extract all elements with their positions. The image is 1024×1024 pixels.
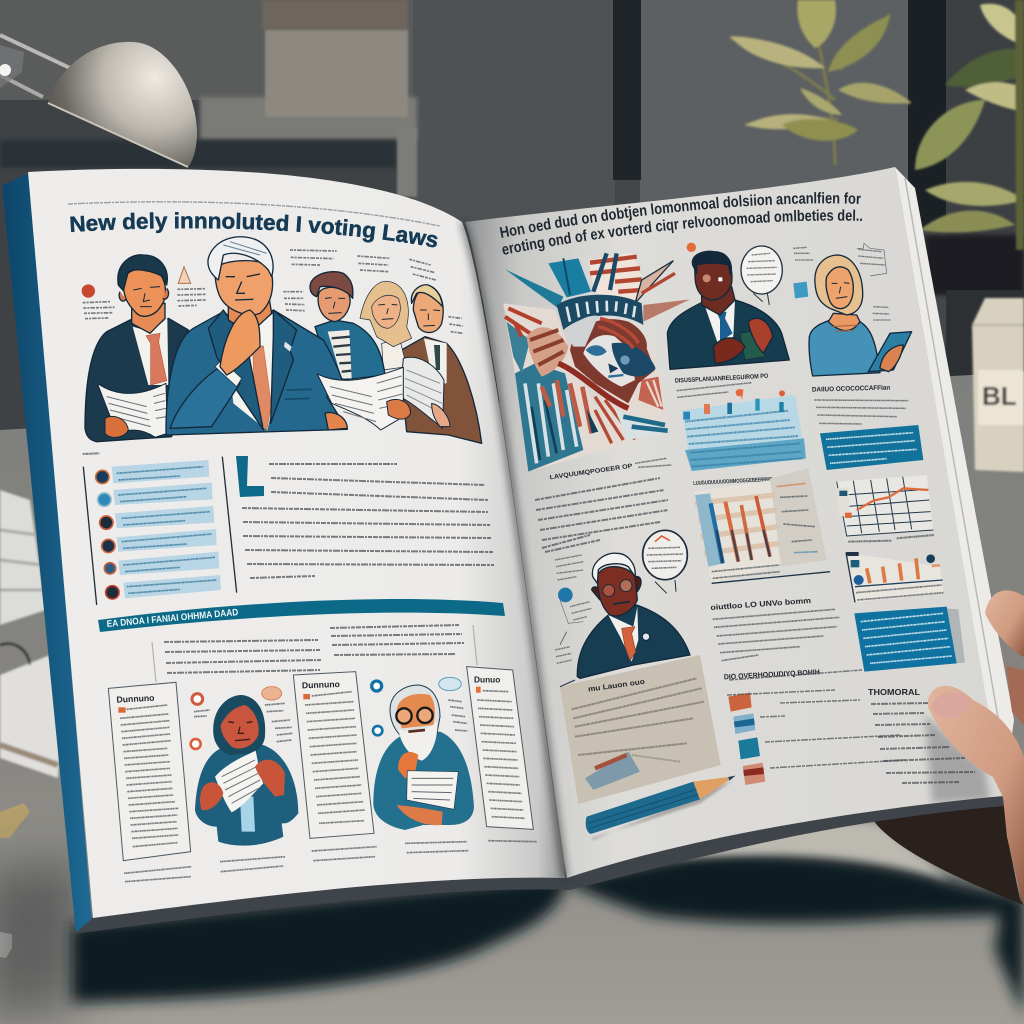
annotation (555, 555, 592, 663)
panel: beige note box: mu Lauon ouo (587, 677, 646, 694)
sidebar box 3 (467, 667, 533, 829)
thumb nail (930, 689, 972, 721)
icon: plant leaves (730, 0, 1024, 250)
section heading: DAIIUO OCOCOCCAFFIan (812, 385, 890, 394)
icon: pencil (586, 776, 736, 840)
small label (83, 450, 99, 457)
upper right illustrations (549, 243, 912, 481)
band text: EA DNOA I FANIAI OHHMA DAAD (106, 607, 239, 630)
crown rays (505, 253, 690, 322)
newspaper: right pair (317, 357, 450, 430)
icons: profile badges (191, 677, 461, 749)
section text (713, 609, 839, 661)
chart heading: LUUGUOUUUUOOMMOOGGEBEERRMS (693, 477, 773, 487)
caption heading: LAVQUUMQPOOEER OP (549, 463, 633, 481)
desk shading left (0, 860, 85, 1024)
legend text lines (727, 670, 905, 768)
panel: teal callout top (820, 425, 923, 470)
section heading: THOMORAL (868, 687, 920, 697)
captions and callouts (124, 700, 537, 882)
illustration: group of people reading newspapers (82, 237, 482, 443)
hand holding the book (928, 590, 1024, 905)
icon: tiny pin (687, 243, 696, 252)
list panel (83, 453, 237, 605)
colour swatches (728, 693, 765, 785)
robe and arm (503, 303, 668, 472)
finger: upper (985, 590, 1024, 657)
book shadow right (562, 853, 1024, 1015)
box on the desk: BL (982, 381, 1017, 411)
desk surface (0, 372, 1024, 1024)
spine shadow (463, 222, 565, 878)
charts column (682, 389, 965, 672)
background: wall and shelves (0, 0, 1024, 470)
illustration: old man in suit (577, 553, 690, 678)
section heading: DIO OVERHOOUDIYQ BOHIH (724, 667, 820, 681)
title: New dely innnoluted I voting Laws (70, 212, 438, 248)
book cover and page edges (2, 167, 1014, 934)
light pool on desk under the book (660, 821, 950, 880)
hand under the book (873, 796, 1024, 905)
illustration: Statue of Liberty (503, 253, 690, 472)
illustration: man in navy suit with phone (667, 251, 789, 369)
callout outline (857, 243, 887, 276)
sidebar box 1: Dunnuno (116, 693, 155, 705)
right page subtitle: eroting ond of ex vorterd ciqr relvoonomoad omlbeties del.. (502, 209, 862, 254)
icon: small house (178, 267, 191, 283)
speech bubble (643, 530, 687, 593)
small top rule text on left page (68, 202, 440, 226)
heading band (98, 599, 505, 632)
drop cap L (236, 456, 264, 497)
annotation text lines (793, 247, 891, 320)
person: blue suit man in centre (166, 237, 347, 435)
icon: tiny card (793, 282, 808, 298)
panel rules (83, 457, 237, 605)
icon: red badge (82, 284, 95, 298)
sidebar box 1 (108, 682, 191, 861)
right page (465, 167, 1003, 878)
section text (814, 400, 908, 424)
section text (677, 383, 752, 397)
speech bubble (741, 246, 782, 305)
list bars (112, 460, 221, 598)
thumb shadow on page (925, 715, 990, 803)
section heading: oiuttloo LO UNVo bomm (710, 596, 811, 612)
desk trinkets (0, 803, 30, 958)
sidebar box 2: Dunnuno (302, 679, 340, 690)
lower right section (868, 687, 975, 783)
person: brown hair person (310, 272, 385, 380)
illustration: blonde woman with tablet (809, 255, 912, 376)
annotation text lines (83, 250, 463, 333)
small chart (846, 552, 943, 602)
box on the desk (972, 298, 1024, 472)
illustration: bearded man with glasses (373, 685, 474, 830)
section heading: DISUSSPLANUANRELEGUIROM PO (675, 373, 768, 385)
panel: teal callout bottom (854, 607, 965, 672)
book shadow left (72, 875, 568, 1002)
stacked papers on the desk (0, 490, 60, 778)
sidebar box 2 (293, 672, 374, 838)
caption text (635, 458, 672, 467)
line chart (835, 475, 934, 542)
old man and beige panel (555, 530, 820, 840)
text columns under band (152, 625, 477, 682)
lower left profiles (108, 667, 537, 882)
panel: blue map chart (682, 389, 806, 471)
person: dark suit man (85, 255, 188, 442)
face and hair (558, 318, 656, 408)
icon: desk lamp (0, 35, 197, 167)
body text block (242, 464, 494, 578)
illustration: woman with paper (195, 695, 298, 846)
section text (871, 703, 975, 783)
left page (28, 169, 565, 918)
list icons (96, 470, 119, 599)
text block under statue (535, 478, 668, 552)
right page subtitle: Hon oed dud on dobtjen lomonmoal dolsiion ancanlfien for (500, 192, 861, 238)
bar chart (694, 468, 830, 583)
person: blonde woman (360, 281, 412, 370)
newspaper: left man (97, 383, 167, 437)
thumb (928, 686, 1024, 905)
list bar text (117, 467, 217, 593)
person: brown jacket man (398, 285, 482, 443)
panel: beige note box (560, 655, 721, 804)
crown band (557, 295, 643, 347)
sidebar box 3: Dunuo (474, 674, 500, 684)
finger: lower (1006, 666, 1024, 725)
